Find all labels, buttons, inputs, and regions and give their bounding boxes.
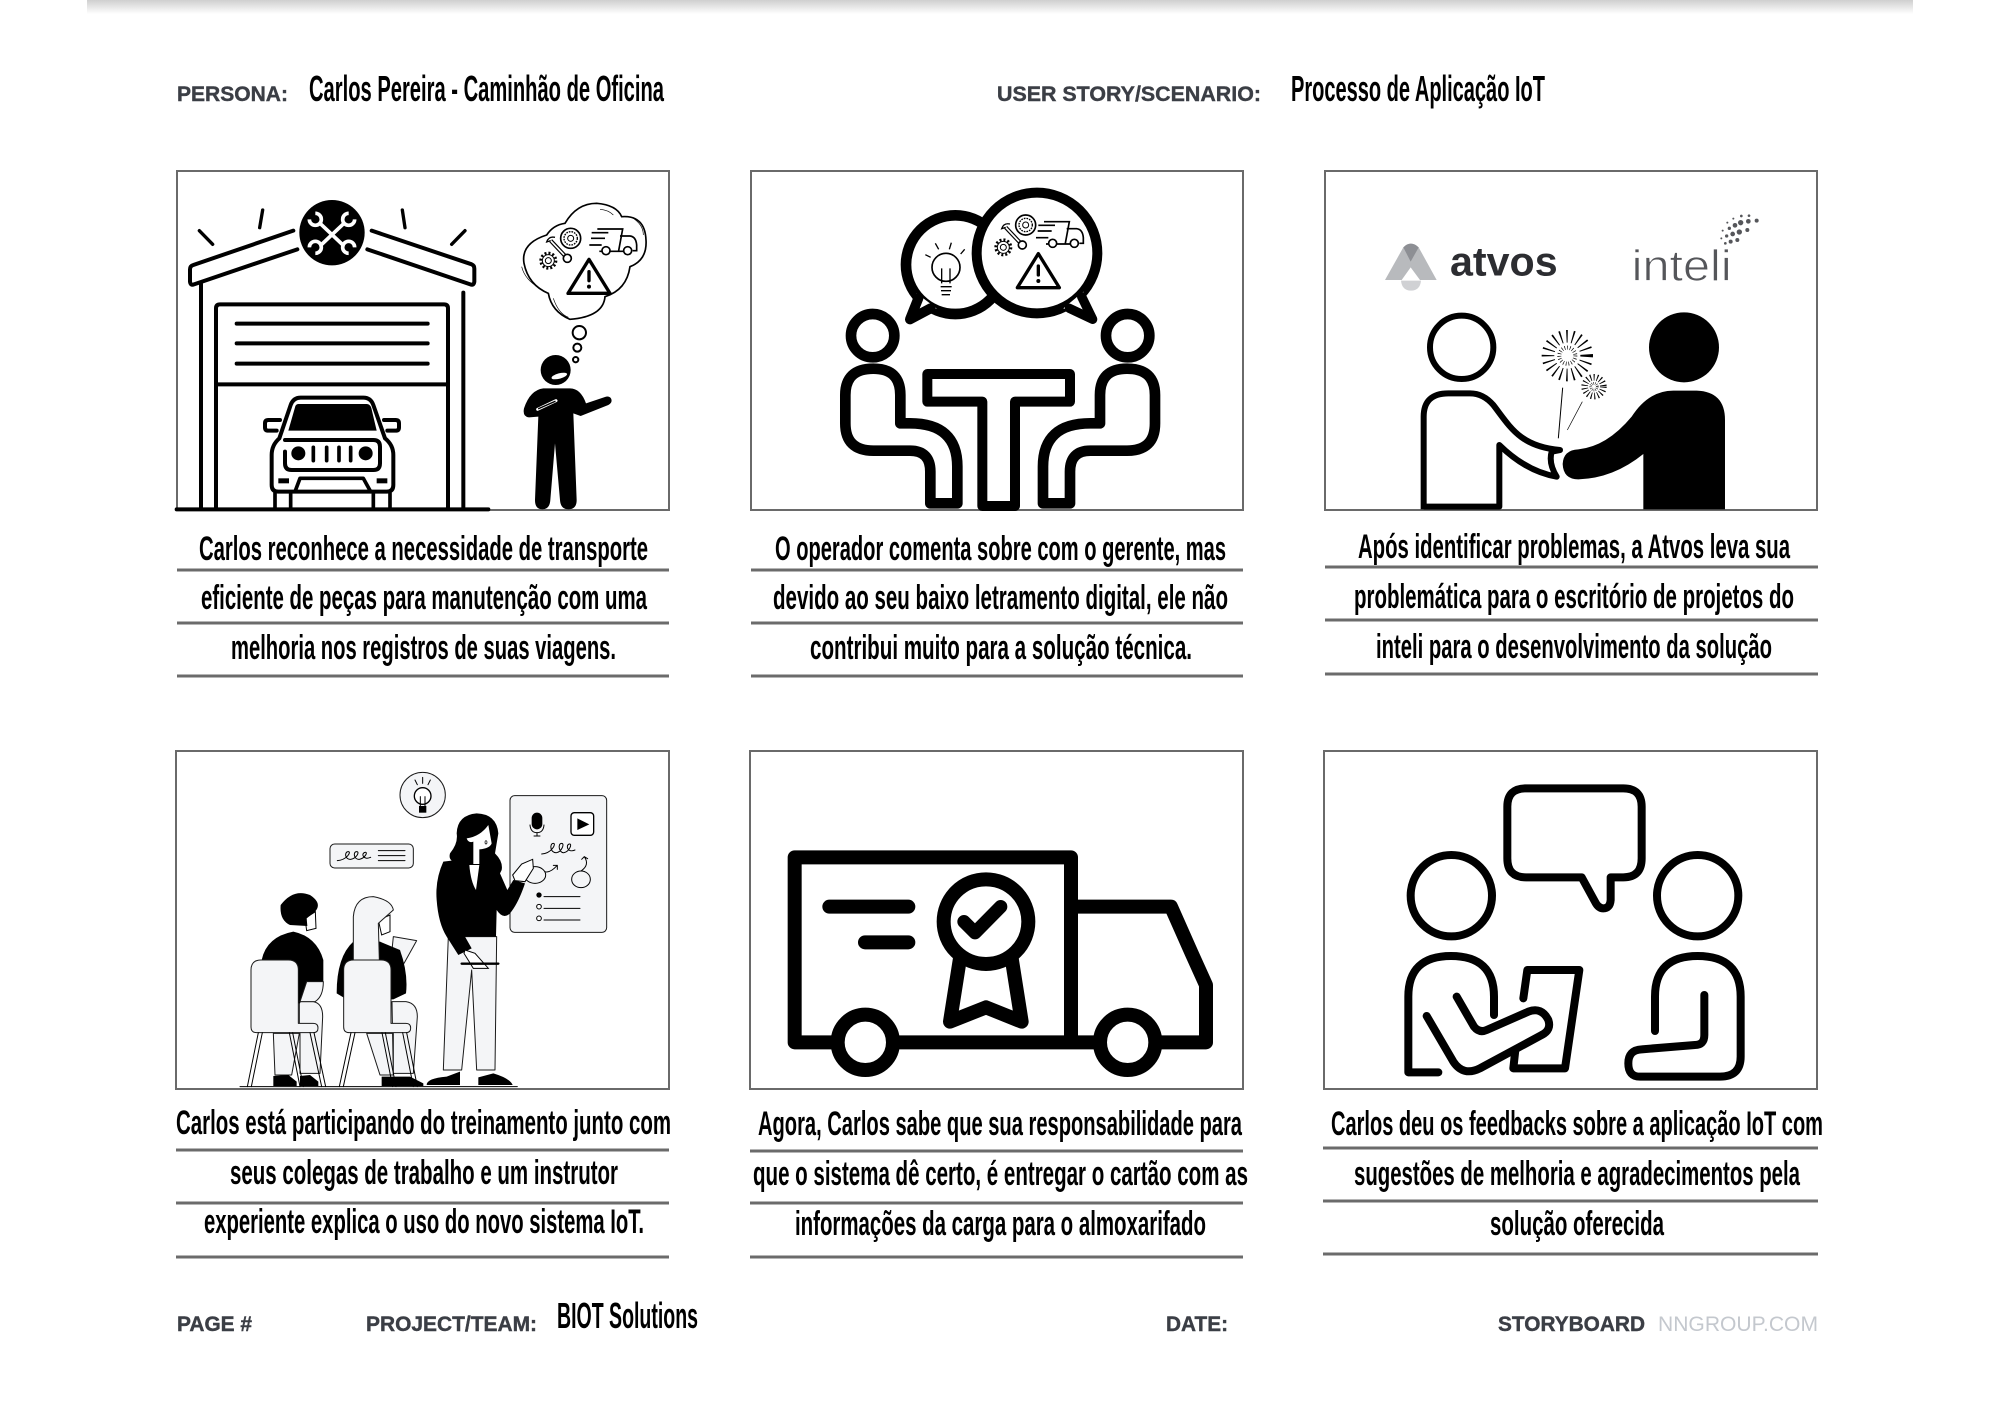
header: persona: Carlos Pereira - Caminhão de Oficina xyxy=(309,68,665,109)
icon: presentation board xyxy=(510,796,607,932)
icon: seated student two xyxy=(337,897,423,1087)
header: user story: USER STORY/SCENARIO: xyxy=(997,83,1261,106)
icon: two people at table xyxy=(845,314,1155,506)
footer: project team xyxy=(366,1295,698,1336)
footer: date: DATE: xyxy=(1166,1313,1228,1336)
page top shadow xyxy=(87,0,1913,14)
header: user story: Processo de Aplicação IoT xyxy=(1291,68,1545,109)
footer: project team: BIOT Solutions xyxy=(557,1295,698,1336)
panel 3: handshake with logos xyxy=(1325,171,1817,510)
caption 1: Carlos reconhece a necessidade de transporte xyxy=(199,530,648,568)
caption 1: eficiente de peças para manutenção com uma xyxy=(201,579,648,617)
logo: atvos xyxy=(1385,239,1558,291)
icon: note card xyxy=(330,844,413,868)
header: persona xyxy=(177,68,665,109)
caption 5: Agora, Carlos sabe que sua responsabilidade para xyxy=(758,1105,1243,1143)
caption 1 xyxy=(177,530,669,676)
footer: page number: PAGE # xyxy=(177,1313,252,1336)
caption 3 xyxy=(1325,528,1818,674)
icon: delivery truck xyxy=(795,857,1206,1070)
icon: speech bubble xyxy=(1507,788,1642,908)
caption 5 xyxy=(750,1105,1248,1257)
caption 4 xyxy=(176,1104,671,1257)
icon: seated student one xyxy=(247,893,326,1087)
caption 6 xyxy=(1323,1105,1823,1254)
footer: storyboard credit: NNGROUP.COM xyxy=(1658,1313,1818,1336)
caption 5: que o sistema dê certo, é entregar o cartão com as xyxy=(753,1155,1248,1193)
logo: atvos: atvos xyxy=(1450,239,1558,285)
icon: handshake xyxy=(1424,312,1725,509)
caption 2 xyxy=(751,530,1243,676)
caption 6: solução oferecida xyxy=(1490,1205,1665,1243)
icon: person thinking xyxy=(524,326,612,509)
header: user story xyxy=(997,68,1545,109)
panel 4: training xyxy=(176,751,669,1089)
footer: storyboard credit xyxy=(1498,1313,1818,1336)
caption 4: experiente explica o uso do novo sistema IoT. xyxy=(204,1203,644,1241)
panel 1: garage and Carlos xyxy=(177,171,669,510)
icon: speech bubbles xyxy=(906,193,1097,319)
icon: fireworks xyxy=(1548,336,1603,438)
icon: lightbulb badge xyxy=(400,772,445,818)
icon: quality seal xyxy=(944,879,1028,1022)
logo: inteli: inteli xyxy=(1632,243,1732,291)
caption 2: contribui muito para a solução técnica. xyxy=(810,629,1192,667)
icon: person with tablet xyxy=(1408,855,1579,1072)
icon: instructor xyxy=(427,813,533,1085)
header: persona: PERSONA: xyxy=(177,83,288,106)
caption 2: O operador comenta sobre com o gerente, mas xyxy=(775,530,1226,568)
footer: project team: PROJECT/TEAM: xyxy=(366,1313,537,1336)
icon: thought cloud xyxy=(522,203,646,319)
caption 4: Carlos está participando do treinamento junto com xyxy=(176,1104,671,1142)
caption 5: informações da carga para o almoxarifado xyxy=(795,1205,1206,1243)
icon: person listening xyxy=(1628,855,1741,1077)
logo: inteli xyxy=(1632,214,1759,291)
caption 4: seus colegas de trabalho e um instrutor xyxy=(230,1154,618,1192)
caption 2: devido ao seu baixo letramento digital, ele não xyxy=(773,579,1228,617)
panel 6: feedback conversation xyxy=(1324,751,1817,1089)
icon: garage with car xyxy=(177,200,488,509)
caption 1: melhoria nos registros de suas viagens. xyxy=(231,629,616,667)
panel 2: operator and manager meeting xyxy=(751,171,1243,510)
footer: storyboard credit: STORYBOARD xyxy=(1498,1313,1645,1336)
panel 5: truck with seal xyxy=(750,751,1243,1089)
